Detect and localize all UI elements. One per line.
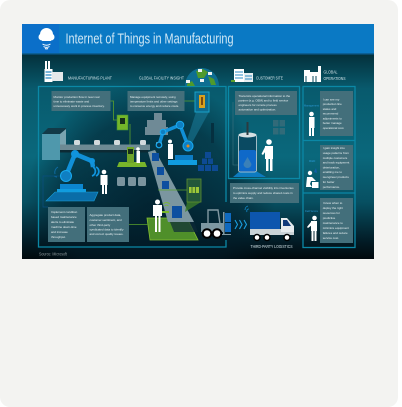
text block: manager: recommend (323, 112, 339, 116)
forklift (201, 210, 231, 238)
text block: monitor production: Monitor production flow in near real (54, 95, 100, 99)
text block: transmits operational (235, 91, 297, 115)
dark column (211, 123, 214, 143)
icon: facility screen (186, 92, 209, 143)
text block: cross-channel visibility: the value chain. (233, 196, 254, 200)
icon: green sensor (117, 115, 128, 130)
text block: cross-channel visibility (230, 183, 299, 203)
green platform (147, 218, 198, 240)
text block: R&D: I gain insight into (323, 146, 345, 150)
text block: transmits operational: engineers for remote process (238, 103, 277, 107)
barrels (117, 177, 146, 186)
text block: implement condition: machine down-time (51, 225, 77, 229)
text block: R&D: usage patterns from (323, 151, 349, 155)
conveyor belt (60, 144, 150, 152)
chevrons (235, 220, 246, 229)
label: third-party logistics: THIRD-PARTY LOGISTICS (250, 244, 292, 249)
text block: aggregate product data: and correct quality issues. (90, 232, 124, 236)
sensor station with worker (117, 147, 147, 167)
blue robot arm left (46, 150, 99, 201)
text block: transmits operational: partner (e.g. OEM) and to field service (238, 98, 289, 102)
text block: field service: I know when to (323, 201, 343, 205)
infographic body (22, 54, 374, 259)
heading: customer site: CUSTOMER SITE (256, 76, 283, 80)
products on belt (74, 140, 162, 147)
icon: seated engineer (306, 168, 318, 188)
blue boxes on ramp (152, 153, 182, 218)
text block: monitor production: unnecessary work in process inventory. (54, 104, 105, 108)
text block: manager: adjustments to (323, 116, 342, 120)
icon: operations buildings (304, 66, 321, 82)
text block: aggregate product data: syndicated data to identify (90, 228, 124, 232)
text block: R&D: enabling me to (323, 170, 342, 174)
text block: field service: minimize equipment (323, 226, 349, 230)
text block: aggregate product data: Aggregate product data, (90, 213, 121, 217)
text block: R&D: multiple customers (323, 156, 348, 160)
text block: field service: failures and reduce (323, 231, 348, 235)
text block: implement condition: throughput. (51, 235, 66, 239)
text block: monitor production (52, 91, 110, 111)
machine block (42, 128, 66, 160)
blue crates stack (198, 152, 218, 171)
text block: implement condition: and increase (51, 230, 68, 234)
left outline box (43, 176, 60, 207)
text block: manager: production line (323, 102, 342, 106)
text block: manage equipment: temperature limits and other settings (130, 100, 178, 104)
text block: aggregate product data: customer sentiment, and (90, 218, 122, 222)
text block: field service: service cost. (323, 236, 339, 240)
icon: field service figure (307, 216, 317, 241)
panel: manufacturing plant (38, 61, 231, 247)
role: field service: Field Service (305, 209, 318, 213)
icon: cloud with signal (38, 28, 54, 49)
text block: R&D: performance. (323, 185, 340, 189)
connector lines (110, 101, 196, 148)
text block: cross-channel visibility: to optimize supply and reduce shared costs in (233, 191, 293, 195)
worker with tablet (262, 139, 273, 171)
text block: monitor production: time to eliminate waste and (54, 100, 89, 104)
text block: implement condition: alerts to eliminate (51, 220, 74, 224)
text block: manage equipment (128, 91, 184, 111)
text block: field service: predictive (323, 216, 336, 220)
text block: field service: maintenance to (323, 221, 343, 225)
panel: global operations (303, 66, 355, 248)
icon: plant building (44, 61, 63, 82)
icon: manager figure (309, 112, 314, 136)
heading: global facility insight: GLOBAL FACILITY INSIGHT (139, 76, 184, 80)
text block: transmits operational: Transmits operational information to the (238, 94, 291, 98)
window (273, 120, 285, 134)
icon: customer buildings (231, 69, 253, 82)
heading: global: GLOBAL (324, 70, 338, 74)
blue robot arm right (156, 121, 197, 165)
role: R&D: R&D (309, 159, 316, 163)
text block: manager: operational cost. (323, 126, 344, 130)
role: management: Management (304, 104, 319, 108)
text block: transmits operational: automation and optimization. (238, 108, 276, 112)
text block: manager: I can see my (323, 98, 340, 102)
text block: implement condition: Implement condition (51, 210, 78, 214)
text block: manager (320, 91, 353, 136)
panel: customer site (228, 69, 300, 249)
text block: R&D: and track equipment (323, 160, 350, 164)
text block: cross-channel visibility: Provide cross-channel visibility into inventories (233, 186, 294, 190)
text block: manage equipment: Manage equipment remotely, using (130, 95, 176, 99)
text block: implement condition (48, 207, 85, 242)
heading: manufacturing plant: MANUFACTURING PLANT (68, 76, 112, 80)
text block: aggregate product data (87, 207, 129, 242)
heading: operations: OPERATIONS (324, 76, 346, 81)
text block: R&D (320, 145, 353, 190)
text block: R&D: for better (323, 180, 334, 184)
worker near arm (168, 140, 173, 159)
truck (245, 206, 294, 240)
text block: R&D: deterioration, (323, 166, 340, 170)
header banner (22, 24, 374, 54)
title: Internet of Things in Manufacturing (66, 30, 234, 48)
text block: manager: better manage (323, 121, 342, 125)
worker with scanner (153, 200, 170, 232)
text block: aggregate product data: other third-party (90, 223, 111, 227)
text block: field service: resources for (323, 211, 340, 215)
text block: manage equipment: to conserve energy and reduce costs. (130, 104, 179, 108)
tank (233, 122, 266, 177)
worker near arm left (100, 170, 108, 194)
stacked drums (145, 113, 168, 135)
icon: globe (185, 68, 219, 86)
green data box (185, 179, 201, 212)
text block: manager: status and (323, 107, 337, 111)
text block: field service: deploy the right (323, 206, 343, 210)
text block: R&D: reengineer products (323, 175, 349, 179)
text block: implement condition: based maintenance (51, 215, 77, 219)
ramp (148, 150, 198, 232)
source note: Source: Microsoft (39, 252, 68, 256)
text block: field service (320, 198, 353, 243)
